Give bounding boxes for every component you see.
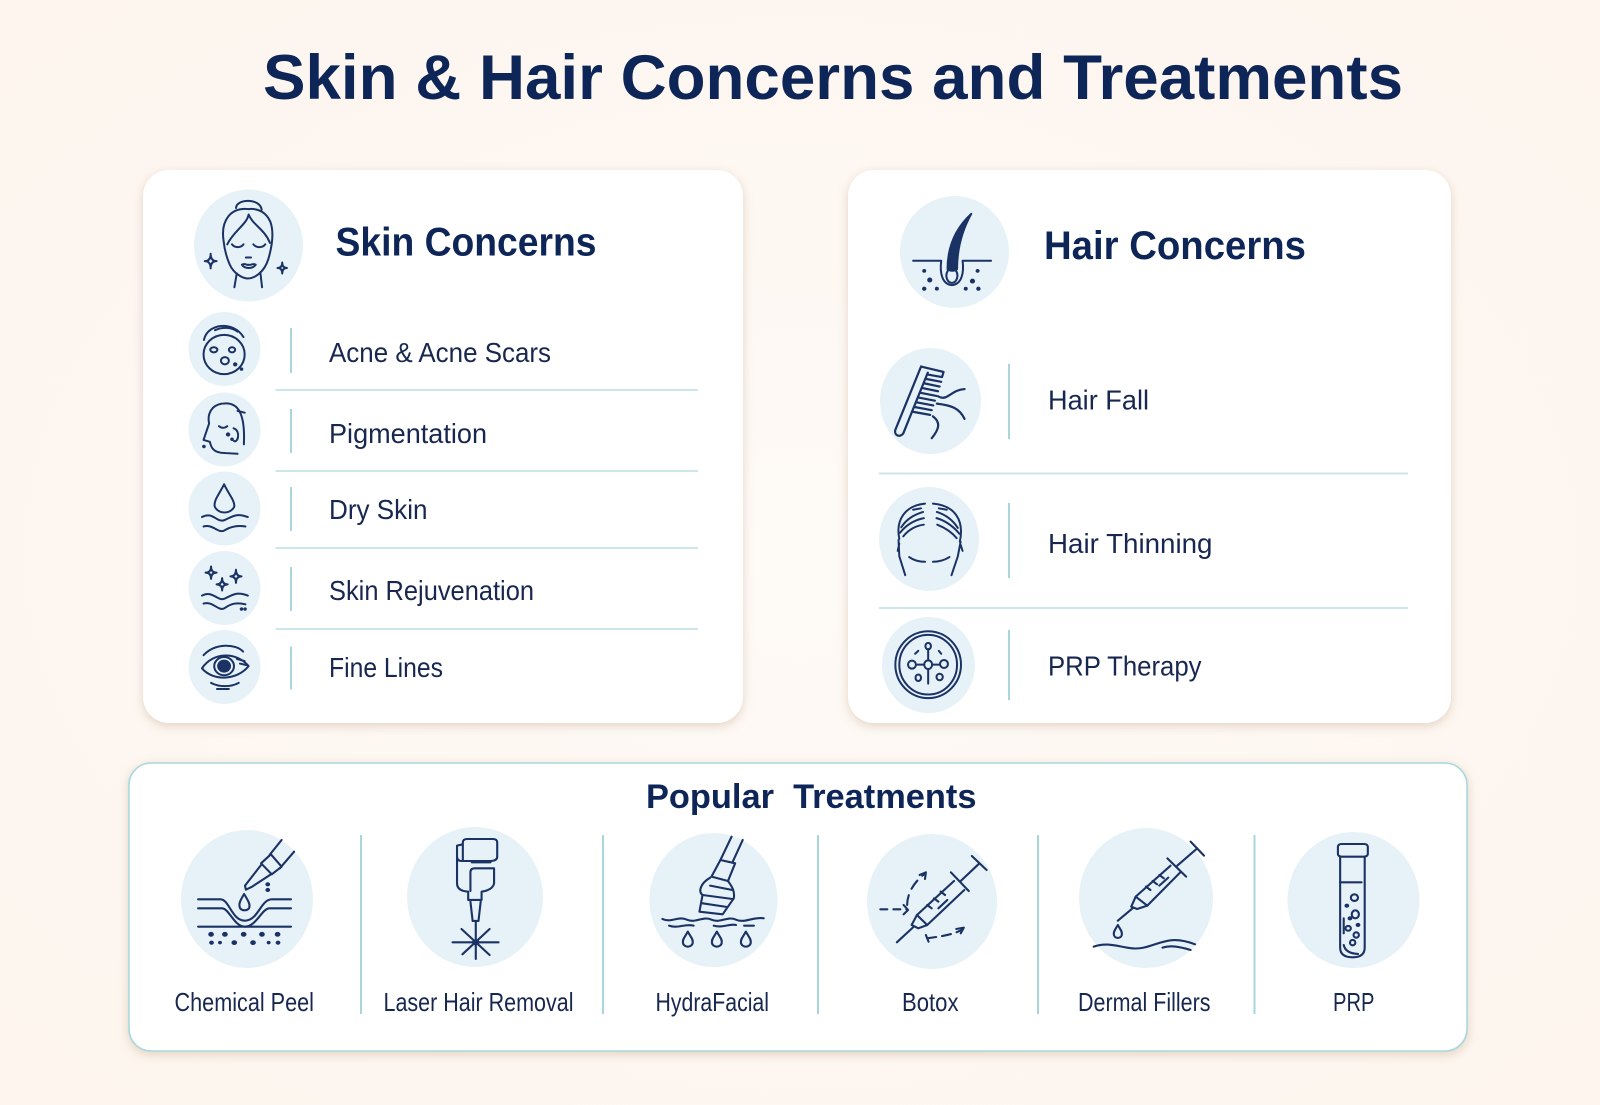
row: pigmentation — [188, 392, 487, 466]
icon: face — [194, 190, 303, 302]
icon: sparkles and waves — [188, 551, 260, 625]
icon: comb — [880, 348, 981, 454]
row: dry skin — [188, 472, 428, 546]
row: acne and acne scars — [188, 312, 551, 386]
row: hair fall — [880, 348, 1149, 454]
label: pigmentation: Pigmentation — [329, 418, 487, 449]
label: hair fall: Hair Fall — [1048, 384, 1149, 416]
heading: popular treatments: Popular Treatments — [646, 778, 976, 816]
label: chemical peel: Chemical Peel — [174, 987, 314, 1017]
label: PRP: PRP — [1333, 987, 1374, 1017]
label: laser hair removal: Laser Hair Removal — [384, 987, 574, 1017]
panel: skin concerns — [143, 170, 743, 723]
treatment: hydrafacial — [650, 833, 778, 1017]
row: hair thinning — [879, 487, 1212, 591]
treatment: chemical peel — [174, 830, 314, 1017]
label: botox: Botox — [902, 987, 958, 1017]
icon: eye — [188, 630, 260, 704]
treatment: botox — [867, 834, 997, 1017]
panel: popular treatments — [129, 763, 1467, 1051]
icon: thinning head — [879, 487, 979, 591]
icon: water drop — [188, 472, 260, 546]
label: hydrafacial: HydraFacial — [656, 987, 769, 1017]
heading: skin concerns: Skin Concerns — [336, 220, 596, 264]
icon: petri dish — [882, 617, 975, 713]
treatment: dermal fillers — [1078, 828, 1213, 1017]
icon: hair follicle — [900, 196, 1009, 308]
title: Skin & Hair Concerns and Treatments — [263, 43, 1403, 113]
heading: hair concerns: Hair Concerns — [1044, 224, 1306, 268]
icon: laser device — [407, 827, 543, 967]
icon: acne — [188, 312, 260, 386]
label: PRP therapy: PRP Therapy — [1048, 650, 1202, 682]
treatment: PRP — [1288, 832, 1420, 1017]
row: fine lines — [188, 630, 443, 704]
icon: hydrafacial wand — [650, 833, 778, 967]
icon: syringe with drop — [1079, 828, 1213, 968]
label: dry skin: Dry Skin — [329, 494, 428, 525]
row: skin rejuvenation — [188, 551, 534, 625]
icon: syringe with arrows — [867, 834, 997, 969]
panel: hair concerns — [848, 170, 1451, 723]
icon: test tube — [1288, 832, 1420, 968]
treatment: laser hair removal — [384, 827, 574, 1017]
label: skin rejuvenation: Skin Rejuvenation — [329, 575, 534, 606]
icon: face profile — [188, 392, 260, 466]
icon: dropper on skin — [181, 830, 313, 968]
label: dermal fillers: Dermal Fillers — [1078, 987, 1210, 1017]
label: hair thinning: Hair Thinning — [1048, 528, 1212, 559]
row: PRP therapy — [882, 617, 1202, 713]
label: fine lines: Fine Lines — [329, 652, 443, 683]
label: acne and acne scars: Acne & Acne Scars — [329, 337, 551, 368]
